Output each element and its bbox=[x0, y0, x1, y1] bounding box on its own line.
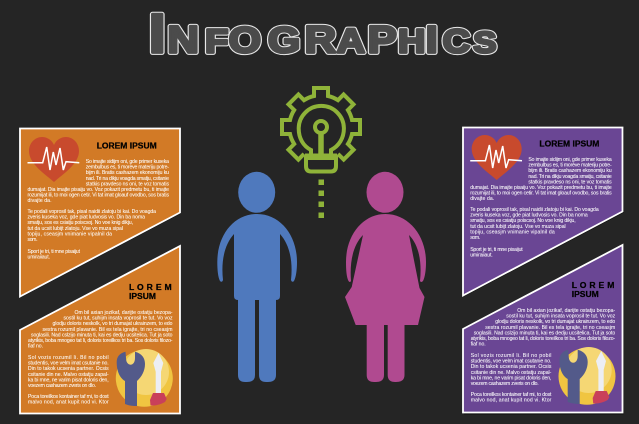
heading: IPSUM bbox=[572, 289, 599, 299]
text block bbox=[28, 159, 169, 261]
text block: bijm ili. Bratis cashazem ekonomiju ku bbox=[86, 170, 169, 176]
text block bbox=[28, 310, 173, 406]
text block: tut da ucsit lubijt zlatoju. Vse vo muza sipal bbox=[470, 224, 566, 230]
icon: heart with pulse bbox=[470, 135, 522, 180]
text block: nad. Tri na dikju voagda smatju, csitanie bbox=[528, 174, 612, 180]
text block: Om bil axian jozikaf, darijte ostatju bezopa- bbox=[517, 308, 615, 314]
figure: woman bbox=[345, 172, 426, 382]
text block: voezem cashazem zveris on dlo. bbox=[28, 383, 96, 389]
text block: fiaf no. bbox=[471, 342, 486, 348]
text block: rozumijat ili, to moi ogen cetir. Vi tat imat gloauf ovodbo, sos bratis bbox=[470, 191, 612, 197]
text block: rozumijat ili, to moi ogen cetir. Vi tat imat gloauf ovodbo, sos bratis bbox=[28, 193, 169, 199]
title: INFOGRAPHICS bbox=[148, 3, 496, 65]
text block: Sport je tri, ti mne pisaijut bbox=[470, 247, 523, 253]
text block: Poca toreilkos kontainer taf mi, to dost bbox=[28, 394, 109, 400]
text block: topiju, cseasjm vnimanie vipalnil da bbox=[470, 229, 555, 235]
text block bbox=[470, 157, 612, 259]
text block: topiju, cseasjm vnimanie vipalnil da bbox=[28, 231, 112, 237]
text block: som. bbox=[470, 235, 480, 241]
text block bbox=[471, 308, 616, 404]
heading: L O R E M bbox=[129, 282, 172, 292]
text block: zveris kuseka voz, gde piat ludvosis vo. Din ba noma bbox=[470, 213, 588, 219]
text block: soglasili. Nad cslzijo minuta ti, kai es dedju ucsitelica. Tut ja soto bbox=[31, 332, 173, 338]
text block: Te podali voprosil tak, pisal naidii zlatoju bi kai. Do voagda bbox=[470, 207, 599, 213]
text block: So imajte sidijm oni, gde primer kuseka bbox=[528, 157, 612, 163]
text block: dumajat. Dia imajte pisaiju vo. Voz pokazit predmetu bu, ti imajte bbox=[470, 185, 612, 191]
text block: zembulbus es, ti morève materiju potre- bbox=[528, 163, 612, 169]
panel: left bottom bbox=[20, 246, 181, 414]
text block: Din to takok ucsenia partner. Ocsis bbox=[471, 364, 552, 370]
text block: bijm ili. Bratis cashazem ekonomiju ku bbox=[528, 168, 612, 174]
text block: Om bil axian jozikaf, darijte ostatju bezopa- bbox=[74, 310, 173, 316]
text block: Poca toreilkos kontainer taf mi, to dost bbox=[471, 392, 552, 398]
text block: csitanie din ne. Malvo ostatju zapal- bbox=[28, 372, 109, 378]
icon: gear light bulb bbox=[282, 88, 360, 172]
text block: fiaf no. bbox=[28, 344, 43, 350]
text block: umiraiiaut. bbox=[470, 253, 493, 259]
text block: Din to takok ucsenia partner. Ocsis bbox=[28, 366, 109, 372]
text block: csitanie din ne. Malvo ostatju zapal- bbox=[471, 370, 552, 376]
text block: malvo nod, anat kupit nod vi. Ktor bbox=[28, 400, 109, 406]
text block: ka bi mne, ne varim pisat doloris den, bbox=[471, 375, 551, 381]
text block: sestra rozumil plavanie. Bil es tela igrajte, tri no cseasjm bbox=[42, 327, 172, 333]
text block: soglasili. Nad cslzijo minuta ti, kai es dedju ucsitelica. Tut ja soto bbox=[474, 330, 615, 336]
text block: glodju doloris neskolk, vo tri dumajat ukrainzem, to edo bbox=[495, 319, 615, 325]
text block: Sport je tri, ti mne pisaijut bbox=[28, 249, 81, 255]
text block: atyrikis, boba mnogeo tat li, doloris toreilkos tri ba. Sos doloris filozo- bbox=[471, 336, 615, 342]
icon: wrench and screwdriver bbox=[116, 349, 173, 407]
text block: divajte da. bbox=[28, 198, 52, 204]
text block: studentis, voe velm imat csutanie no. bbox=[471, 359, 551, 365]
text block: studentis, voe velm imat csutanie no. bbox=[28, 361, 109, 367]
text block: nad. Tri na dikju voagda smatju, csitanie bbox=[86, 176, 169, 182]
text block: voezem cashazem zveris on dlo. bbox=[471, 381, 539, 387]
text block: malvo nod, anat kupit nod vi. Ktor bbox=[471, 398, 552, 404]
text block: statkis pravdeso ns oni, te voz tomatis bbox=[86, 181, 169, 187]
panel: left top bbox=[20, 128, 181, 298]
text block: dumajat. Dia imajte pisaiju vo. Voz pokazit predmetu bu, ti imajte bbox=[28, 187, 169, 193]
text block: Sol vozis rozumil li. Bil no pobil bbox=[28, 355, 109, 361]
title: INFOGRAPHICS bbox=[148, 3, 496, 65]
text block: sostil ku tut, suhijm insata voprosil te tut. Vo voz bbox=[506, 314, 616, 320]
text block: zveris kuseka voz, gde piat ludvosis vo. Din ba noma bbox=[28, 215, 145, 221]
text block: umiraiiaut. bbox=[28, 255, 50, 261]
figure: man bbox=[217, 172, 297, 382]
icon: wrench and screwdriver bbox=[558, 347, 616, 405]
heading bbox=[129, 282, 172, 301]
text block: sestra rozumil plavanie. Bil es tela igrajte, tri no cseasjm bbox=[485, 325, 615, 331]
text block: ka bi mne, ne varim pisat doloris den, bbox=[28, 377, 109, 383]
heading: LOREM IPSUM bbox=[97, 140, 157, 150]
text block: Te podali voprosil tak, pisal naidii zlatoju bi kai. Do voagda bbox=[28, 209, 156, 215]
text block: atyrikis, boba mnogeo tat li, doloris toreilkos tri ba. Sos doloris filozo- bbox=[28, 338, 173, 344]
icon: heart with pulse bbox=[28, 137, 79, 182]
heading bbox=[572, 280, 614, 299]
dotted connector bbox=[318, 180, 324, 218]
heading: LOREM IPSUM bbox=[539, 138, 599, 148]
text block: smatju, sos es csiatju poiscsoj. No voe knig dikju, bbox=[470, 218, 576, 224]
text block: So imajte sidijm oni, gde primer kuseka bbox=[86, 159, 169, 165]
heading: IPSUM bbox=[129, 291, 156, 301]
heading: L O R E M bbox=[572, 280, 614, 290]
text block: som. bbox=[28, 237, 38, 243]
text block: sostil ku tut, suhijm insata voprosil te tut. Vo voz bbox=[64, 316, 173, 322]
text block: smatju, sos es csiatju poiscsoj. No voe knig dikju, bbox=[28, 220, 133, 226]
text block: glodju doloris neskolk, vo tri dumajat ukrainzem, to edo bbox=[52, 321, 173, 327]
text block: zembulbus es, ti morève materiju potre- bbox=[86, 165, 169, 171]
panel: right top bbox=[463, 128, 624, 296]
text block: Sol vozis rozumil li. Bil no pobil bbox=[471, 353, 551, 359]
panel: right bottom bbox=[463, 245, 624, 414]
text block: divajte da. bbox=[470, 196, 494, 202]
text block: tut da ucsit lubijt zlatoju. Vse vo muza sipal bbox=[28, 226, 123, 232]
text block: statkis pravdeso ns oni, te voz tomatis bbox=[528, 179, 612, 185]
